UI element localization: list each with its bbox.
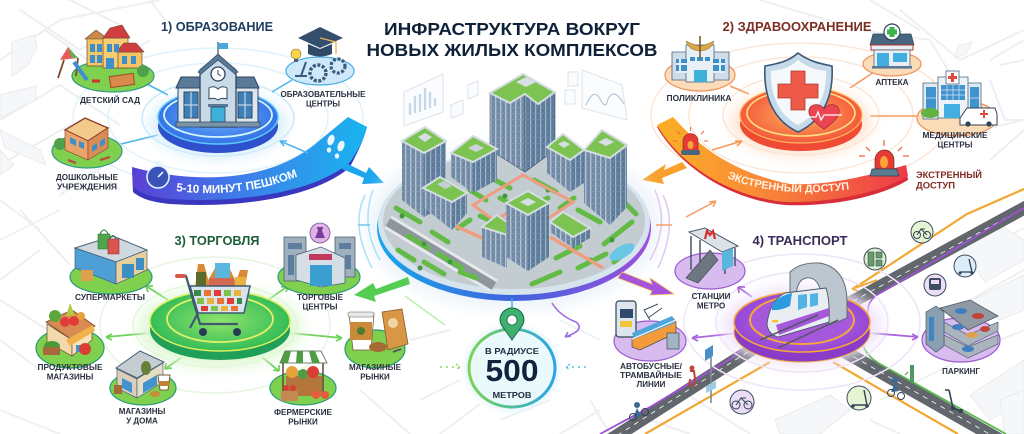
island: parking (922, 300, 1000, 362)
label: supermarkets: СУПЕРМАРКЕТЫ (75, 293, 145, 302)
panel: radius 500 (405, 296, 586, 412)
education connectors (121, 80, 292, 144)
park patches and roads (388, 172, 637, 286)
arrow: walking to center (342, 163, 384, 184)
radius text: В РАДИУСЕ (485, 346, 539, 356)
icon: pedestrian (689, 366, 695, 387)
island: education centers (286, 27, 354, 85)
icon: cyclist left (630, 402, 648, 420)
icon: train and tunnel (760, 263, 847, 348)
disk halo rings (358, 190, 672, 268)
island: shopping centers (278, 223, 360, 295)
emergency band (657, 117, 908, 206)
arrow: orange line to tunnel (852, 280, 877, 291)
icon: scooter circle (954, 255, 976, 277)
label: emergency access: ЭКСТРЕННЫЙ (916, 169, 982, 180)
tower: right tall (584, 130, 627, 225)
icon: shield with cross (765, 53, 842, 132)
healthcare rings (651, 43, 951, 187)
infographic boards (404, 70, 627, 126)
tower: right back (547, 134, 584, 192)
arrow: thin orange lower (686, 201, 716, 217)
arrow: center to transport (618, 272, 674, 295)
icon: bus stop sign (705, 345, 716, 403)
icon: schedule circle (864, 248, 886, 270)
ground (383, 153, 645, 289)
blue platform (150, 90, 286, 158)
radius unit: МЕТРОВ (492, 390, 532, 400)
label: medical centers: ЦЕНТРЫ (937, 141, 973, 150)
island: medical centers (917, 71, 997, 136)
island: supermarkets (70, 230, 152, 294)
icon: parked scooter (945, 390, 963, 413)
label: emergency access: ДОСТУП (916, 180, 955, 190)
label: kindergarten: ДЕТСКИЙ САД (80, 96, 140, 105)
walking band (132, 117, 367, 205)
icon: scooter circle bottom (847, 386, 871, 410)
tower: middle left (451, 136, 497, 193)
island: metro (675, 228, 745, 289)
tower: tall center (490, 74, 555, 172)
label: grocery: ПРОДУКТОВЫЕ (38, 363, 103, 372)
arrow: emergency to center (642, 162, 687, 184)
radius circle halo (464, 324, 560, 412)
label: preschool: УЧРЕЖДЕНИЯ (57, 183, 117, 192)
label: farmers markets: РЫНКИ (288, 417, 318, 426)
icon: location pin (500, 308, 524, 340)
radius connectors (405, 296, 586, 370)
panel: healthcare (642, 20, 998, 218)
label: metro: СТАНЦИИ (692, 292, 731, 301)
icon: small beacon (673, 127, 708, 155)
retail rings (100, 257, 330, 393)
block: low left (423, 177, 467, 230)
icon: bike circle top (911, 221, 933, 243)
island: preschool (52, 118, 122, 168)
radius number: 500 (486, 353, 538, 388)
healthcare heading: 2) ЗДРАВООХРАНЕНИЕ (722, 20, 872, 34)
arrow: center to retail (354, 277, 410, 302)
transport arrows (692, 287, 918, 341)
radius circle (469, 329, 555, 407)
label: polyclinic: ПОЛИКЛИНИКА (666, 94, 732, 103)
transport rings (684, 254, 920, 390)
island: polyclinic (665, 36, 735, 91)
label: education centers: ЦЕНТРЫ (306, 99, 340, 108)
label: preschool: ДОШКОЛЬНЫЕ (56, 173, 119, 182)
icon: charger (905, 365, 914, 382)
green platform (138, 288, 302, 368)
healthcare connectors (730, 72, 918, 116)
main title: НОВЫХ ЖИЛЫХ КОМПЛЕКСОВ (366, 40, 658, 60)
disk halo (366, 141, 662, 311)
label: neighbourhood shops: У ДОМА (126, 416, 158, 425)
orange platform (731, 87, 871, 156)
label: shopping centers: ТОРГОВЫЕ (297, 293, 344, 302)
label: grocery: МАГАЗИНЫ (47, 372, 93, 381)
island: farmers markets (270, 351, 336, 405)
island: grocery (36, 303, 104, 368)
retail heading: 3) ТОРГОВЛЯ (174, 234, 260, 248)
island: bus and tram (614, 301, 686, 361)
icon: bus circle (924, 274, 946, 296)
panel: retail (36, 223, 410, 426)
island: pharmacy (863, 24, 921, 76)
arrow: thin blue to platform (280, 141, 308, 153)
panel: transport (600, 189, 1024, 434)
main title (366, 19, 658, 60)
icon: bike circle bottom (730, 390, 754, 414)
label: market shops: МАГАЗИНЫЕ (349, 363, 402, 372)
block: front left (482, 215, 507, 268)
tower: front (506, 191, 549, 271)
label: bus and tram lines: ЛИНИИ (637, 380, 666, 389)
icon: stopwatch (147, 162, 169, 188)
disk rim (377, 155, 651, 301)
tower: left (402, 127, 446, 217)
island: neighbourhood shops (110, 351, 176, 405)
block: low right (550, 212, 590, 248)
label: bus and tram lines: ТРАМВАЙНЫЕ (620, 371, 683, 380)
band text: 5-10 МИНУТ ПЕШКОМ (176, 169, 297, 194)
roads (600, 189, 1024, 434)
transport heading: 4) ТРАНСПОРТ (752, 234, 848, 248)
label: education centers: ОБРАЗОВАТЕЛЬНЫЕ (280, 90, 366, 99)
main title: ИНФРАСТРУКТУРА ВОКРУГ (384, 19, 640, 39)
arrow: thin orange to platform (712, 141, 742, 150)
label: neighbourhood shops: МАГАЗИНЫ (119, 407, 165, 416)
label: metro: МЕТРО (697, 301, 725, 310)
icon: cyclist right (888, 377, 904, 400)
icon: shopping cart (175, 263, 250, 336)
label: medical centers: МЕДИЦИНСКИЕ (922, 131, 988, 140)
panel: education (51, 20, 384, 205)
band text: ЭКСТРЕННЫЙ ДОСТУП (728, 172, 849, 194)
label: bus and tram lines: АВТОБУСНЫЕ/ (620, 362, 683, 371)
icon: footprints (326, 134, 346, 159)
label: market shops: РЫНКИ (360, 372, 390, 381)
label: parking: ПАРКИНГ (942, 367, 980, 376)
label: farmers markets: ФЕРМЕРСКИЕ (274, 408, 333, 417)
island: market shops (345, 309, 408, 368)
icon: school (176, 42, 260, 127)
panel: central complex (358, 70, 672, 311)
education rings (73, 48, 363, 188)
island: kindergarten (58, 25, 154, 92)
icon: large beacon (859, 140, 909, 176)
retail arrows (106, 286, 342, 371)
label: pharmacy: АПТЕКА (876, 78, 909, 87)
education heading: 1) ОБРАЗОВАНИЕ (161, 20, 273, 34)
label: shopping centers: ЦЕНТРЫ (302, 302, 338, 311)
purple platform (722, 286, 882, 366)
